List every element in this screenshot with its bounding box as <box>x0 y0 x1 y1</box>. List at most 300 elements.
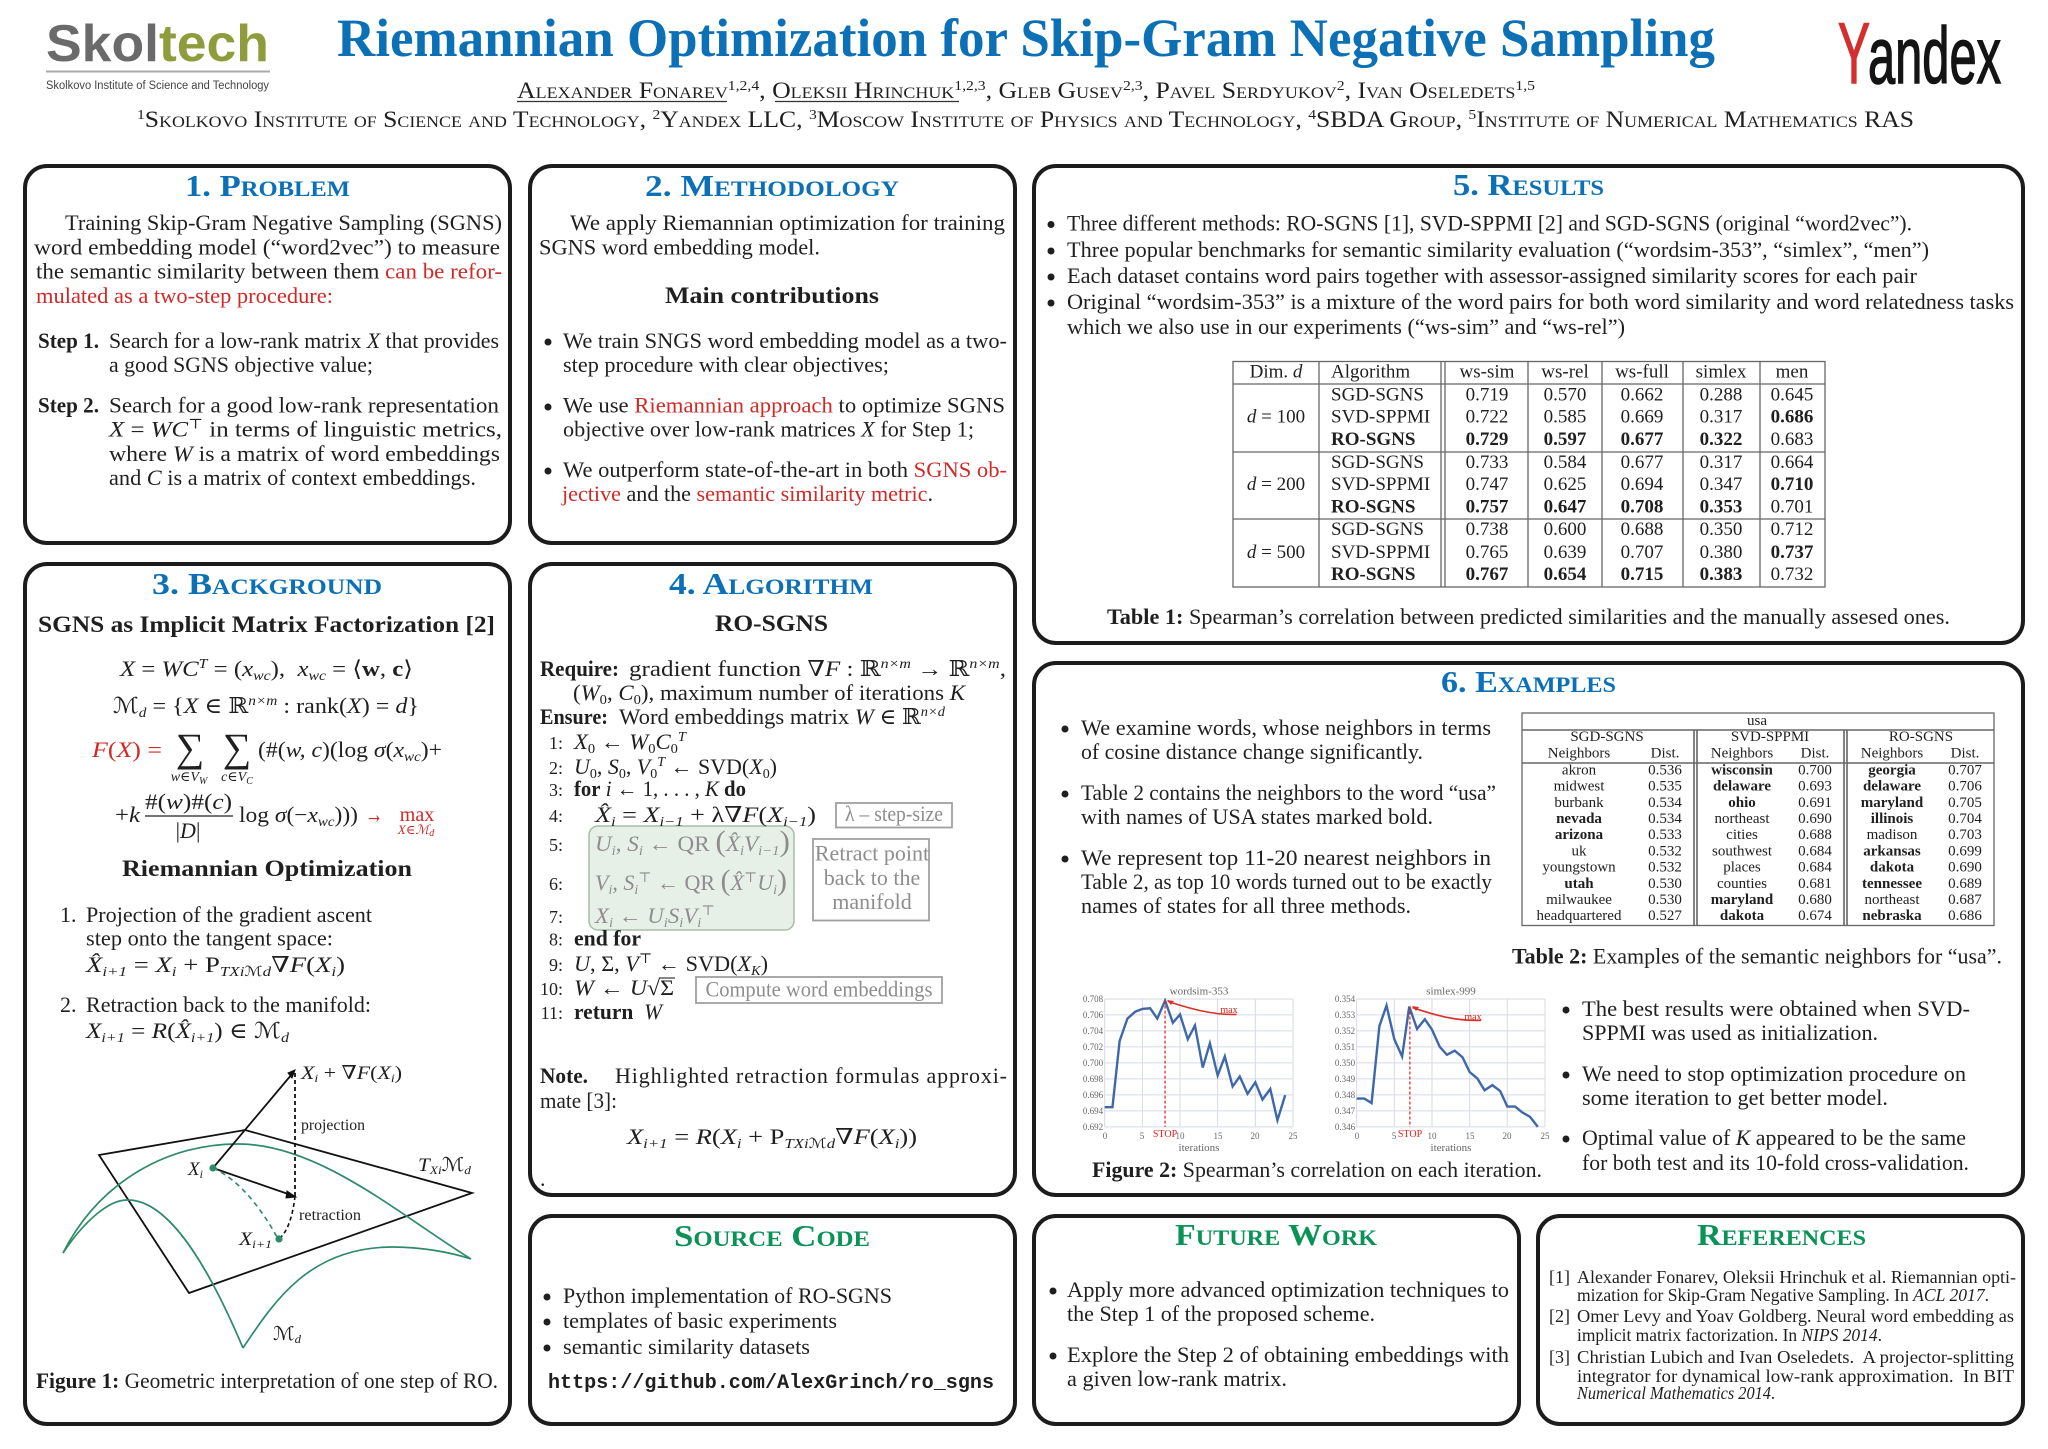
subheading: Main contributions: Main contributions <box>665 283 879 309</box>
formula: manifold definition: X) = d} <box>347 693 418 718</box>
numbered list: optimization steps: 1. <box>60 902 76 927</box>
text block: methodology intro: We apply Riemannian optimization for training <box>570 210 1005 235</box>
text block: require and ensure: ), maximum number of iterations <box>641 680 950 705</box>
table 1: Spearman correlation: 0.664 <box>1771 452 1814 473</box>
table 1: Spearman correlation: 0.707 <box>1621 542 1663 563</box>
algorithm steps: 0 <box>590 767 597 782</box>
table 2: usa neighbors: SVD-SPPMI <box>1731 729 1809 745</box>
heading: Future Work: Future Work <box>1175 1217 1377 1252</box>
text block: step 1: a good SGNS objective value; <box>109 352 373 377</box>
algorithm steps: ) <box>777 864 787 897</box>
bullet list: source code contents: templates of basic experiments <box>563 1308 837 1333</box>
algorithm steps: U, Σ, V <box>574 951 639 976</box>
heading: Background: 3. Background <box>152 566 382 601</box>
affiliations: 5 <box>1468 108 1476 123</box>
affiliations: Institute of Numerical Mathematics RAS <box>1476 107 1914 132</box>
algorithm steps: i <box>740 844 744 859</box>
bullet list: findings: The best results were obtained when SVD- <box>1582 996 1970 1021</box>
table 2: usa neighbors: 0.703 <box>1948 827 1982 843</box>
table 1: Spearman correlation: ws-rel <box>1541 362 1589 382</box>
table 2: usa neighbors: akron <box>1562 762 1597 778</box>
text block: step 2 <box>38 392 502 490</box>
table 2: usa neighbors: 0.674 <box>1798 908 1832 924</box>
algorithm steps: ← QR <box>651 870 721 895</box>
reference list: integrator for dynamical low-rank approximation. In BIT <box>1577 1366 2014 1386</box>
bullet list: contributions: We use Riemannian approach to optimize SGNS <box>563 392 1005 418</box>
numbered list: optimization steps: F(X <box>290 952 328 977</box>
panel: 2. Methodology <box>530 166 1015 543</box>
line chart: simlex-999: simlex-999 <box>1426 986 1476 998</box>
figure: geometric interpretation diagram: + ∇ <box>318 1063 357 1084</box>
text block: require and ensure: (W <box>573 680 599 705</box>
algorithm steps: ← <box>613 903 647 928</box>
algorithm steps: ) <box>770 754 777 779</box>
logo: Skoltech: Skolkovo Institute of Science and Technology <box>46 80 269 92</box>
text block: require and ensure: K <box>949 680 966 705</box>
figure: geometric interpretation diagram: ℳ <box>442 1155 464 1176</box>
algorithm steps: V <box>744 831 761 856</box>
text block: step 2: in terms of linguistic metrics, <box>203 416 502 442</box>
table 2: usa neighbors: SGD-SGNS <box>1570 729 1644 745</box>
reference list: Omer Levy and Yoav Goldberg. Neural word embedding as <box>1577 1306 2014 1326</box>
table 1: Spearman correlation: 0.683 <box>1771 429 1813 450</box>
logo: Skoltech: Skoltech <box>46 15 269 73</box>
panel: 5. Results <box>1034 166 2023 643</box>
formula: factorization: = ⟨ <box>326 656 362 681</box>
text block: note: = <box>668 1124 696 1149</box>
figure: geometric interpretation diagram: Xi <box>429 1163 442 1177</box>
numbered list: optimization steps: Retraction back to the manifold: <box>86 992 371 1017</box>
line chart: wordsim-353: wordsim-353 <box>1170 986 1229 998</box>
text block: note: i <box>737 1137 742 1152</box>
algorithm steps: , <box>626 754 637 779</box>
algorithm steps: , <box>616 831 627 856</box>
callout: retract point: manifold <box>832 889 912 914</box>
algorithm steps: U <box>595 831 614 856</box>
numbered list: optimization steps: i+1 <box>101 1031 125 1046</box>
table 1: Spearman correlation: SVD-SPPMI <box>1331 407 1430 428</box>
figure: geometric interpretation diagram: ℳ <box>273 1324 293 1345</box>
table 1: Spearman correlation: 0.317 <box>1700 452 1742 473</box>
figure: geometric interpretation diagram: i <box>314 1071 318 1085</box>
caption: table 1: Table 1: Spearman’s correlation between predicted similarities and the manually assesed ones. <box>1107 604 1950 629</box>
algorithm steps: 10: <box>540 979 563 999</box>
table 1: Spearman correlation: 0.737 <box>1771 542 1814 563</box>
figure: geometric interpretation diagram: i+1 <box>252 1237 272 1251</box>
algorithm steps: i <box>639 844 643 859</box>
table 2: usa neighbors: burbank <box>1554 795 1604 811</box>
table 1: Spearman correlation: 0.686 <box>1771 407 1813 428</box>
numbered list: optimization steps: X <box>154 952 174 977</box>
algorithm steps: ) <box>807 802 816 827</box>
table 1: Spearman correlation: 0.732 <box>1771 564 1813 585</box>
text block: note: i+1 <box>643 1137 668 1152</box>
reference list: [1] <box>1549 1267 1570 1287</box>
line chart: simlex-999: 0.348 <box>1335 1090 1356 1100</box>
line chart: wordsim-353 <box>1083 986 1298 1154</box>
algorithm steps: 6: <box>549 874 563 894</box>
formula: factorization: wc <box>308 669 327 684</box>
table 1: Spearman correlation: 0.288 <box>1700 385 1742 406</box>
numbered list: optimization steps: T <box>220 965 231 980</box>
formula: objective function: X∈ℳ <box>398 822 429 837</box>
line chart: simlex-999: 25 <box>1540 1131 1550 1141</box>
caption: figure 1: Figure 1: Geometric interpretation of one step of RO. <box>36 1368 498 1393</box>
affiliations: Moscow Institute of Physics and Technology, <box>817 107 1308 132</box>
line chart: wordsim-353: 15 <box>1214 1131 1223 1141</box>
algorithm steps: X <box>573 729 590 754</box>
heading: Problem: 1. Problem <box>185 168 350 203</box>
formula: manifold definition: X ∈ ℝ <box>184 693 244 718</box>
table 1: Spearman correlation: SGD-SGNS <box>1331 452 1424 473</box>
bullet list: contributions: step procedure with clear objectives; <box>563 352 889 377</box>
table 1: Spearman correlation: ws-full <box>1615 362 1669 382</box>
table 1: Spearman correlation: 0.733 <box>1466 452 1508 473</box>
table 1: Spearman correlation: 0.729 <box>1466 429 1508 450</box>
formula: manifold definition: ℳ <box>113 693 137 718</box>
panel: Source Code <box>530 1216 1015 1424</box>
figure: geometric interpretation diagram: F(X <box>357 1063 389 1084</box>
line chart: simlex-999: 0.352 <box>1335 1026 1355 1036</box>
table 1: Spearman correlation: 0.585 <box>1544 407 1586 428</box>
line chart: wordsim-353: 0.692 <box>1083 1122 1103 1132</box>
table 2: usa neighbors: maryland <box>1861 795 1924 811</box>
table 2: usa neighbors: arizona <box>1555 827 1604 843</box>
line chart: simlex-999: 0.347 <box>1335 1106 1356 1116</box>
table 1: Spearman correlation: 0.701 <box>1771 497 1813 518</box>
figure: geometric interpretation diagram: X <box>238 1229 254 1250</box>
line chart: simlex-999: 0.350 <box>1335 1058 1356 1068</box>
table 2: usa neighbors: utah <box>1564 876 1594 892</box>
table 2: usa neighbors: 0.533 <box>1648 827 1682 843</box>
table 1: Spearman correlation: 0.645 <box>1771 385 1813 406</box>
affiliations: SBDA Group, <box>1316 107 1468 132</box>
algorithm steps: 9: <box>549 955 563 975</box>
numbered list: optimization steps: ∇ <box>271 952 290 977</box>
highlight: retraction block <box>589 826 794 930</box>
table 2: usa neighbors: northeast <box>1715 811 1770 827</box>
logo: Yandex <box>1838 6 2001 102</box>
bullet list: findings <box>1562 996 1970 1175</box>
algorithm steps: 8: <box>549 930 563 950</box>
line chart: wordsim-353: 0.696 <box>1083 1090 1104 1100</box>
algorithm steps: K <box>750 964 761 979</box>
subheading: Riemannian Optimization: Riemannian Optimization <box>122 856 412 882</box>
bullet list: examples description: with names of USA states marked bold. <box>1081 804 1433 829</box>
table 1: Spearman correlation: Dim. d <box>1250 362 1303 382</box>
numbered list: optimization steps: 2. <box>60 992 76 1017</box>
bullet list: results: Each dataset contains word pairs together with assessor-assigned similarity scores for each pair <box>1067 263 1918 288</box>
figure: geometric interpretation diagram: retraction <box>299 1207 361 1224</box>
text block: note: TXi <box>784 1137 809 1152</box>
numbered list: optimization steps: + P <box>177 952 220 977</box>
numbered list: optimization steps: i+1 <box>102 965 127 980</box>
table 1: Spearman correlation: RO-SGNS <box>1331 497 1415 518</box>
table 2: usa neighbors: tennessee <box>1862 876 1922 892</box>
reference list: [3] <box>1549 1347 1570 1367</box>
figure: geometric interpretation diagram: d <box>295 1332 302 1346</box>
formula: factorization: ), <box>271 656 297 681</box>
table 2: usa neighbors: dakota <box>1720 908 1765 924</box>
panel: 4. Algorithm <box>530 564 1015 1195</box>
formula: manifold definition: : rank( <box>277 693 347 718</box>
panel: 3. Background <box>25 564 510 1424</box>
bullet list: future work: Apply more advanced optimization techniques to <box>1067 1277 1509 1302</box>
algorithm steps: V <box>683 903 700 928</box>
formula: factorization: x <box>296 656 309 681</box>
bullet list: results: Three popular benchmarks for semantic similarity evaluation (“wordsim-353”, “simlex”, “men”) <box>1067 237 1929 262</box>
table 2: usa neighbors: RO-SGNS <box>1889 729 1953 745</box>
line chart: simlex-999 <box>1335 986 1550 1154</box>
table 1: Spearman correlation: 0.719 <box>1466 385 1508 406</box>
text block: require and ensure <box>540 656 1006 729</box>
table 1: Spearman correlation: 0.712 <box>1771 519 1813 540</box>
formula: objective function: c∈V <box>221 770 246 785</box>
text block: require and ensure: 0 <box>600 693 607 708</box>
text block: require and ensure: Require: <box>540 656 619 681</box>
text block: require and ensure: n×m <box>881 657 911 672</box>
affiliations: Yandex LLC, <box>660 107 809 132</box>
text block: step 2: ⊤ <box>188 418 203 432</box>
formula: objective function: wc <box>404 750 422 765</box>
bullet list: examples description: of cosine distance change significantly. <box>1081 739 1423 764</box>
text block: note: . <box>540 1166 546 1191</box>
heading: Algorithm: 4. Algorithm <box>669 566 873 601</box>
bullet list: source code contents: semantic similarity datasets <box>563 1334 810 1359</box>
algorithm steps: return W <box>574 999 664 1024</box>
line chart: simlex-999: 0.349 <box>1335 1074 1356 1084</box>
line chart: wordsim-353: 0.704 <box>1083 1026 1104 1036</box>
formula: manifold definition: d <box>139 706 148 721</box>
numbered list: optimization steps: X̂ <box>85 952 104 977</box>
table 1: Spearman correlation: 0.380 <box>1700 542 1742 563</box>
table 2: usa neighbors: 0.680 <box>1798 892 1832 908</box>
text block: step 2: X = WC <box>109 416 184 442</box>
formula: objective function: ∑ <box>176 725 204 770</box>
table 2: usa neighbors: Dist. <box>1951 746 1979 762</box>
table 2: usa neighbors: 0.707 <box>1948 762 1982 778</box>
formula: factorization: wc <box>253 669 272 684</box>
algorithm steps: 5: <box>549 835 563 855</box>
text block: note: Highlighted retraction formulas approxi- <box>615 1063 1007 1088</box>
formula: factorization: = ( <box>207 656 242 681</box>
text block: require and ensure: , <box>607 680 618 705</box>
algorithm steps: ⊤ <box>638 871 651 886</box>
line chart: wordsim-353: iterations <box>1179 1142 1219 1154</box>
text block: note: i <box>895 1137 900 1152</box>
text block: note: )) <box>899 1124 917 1149</box>
formula: objective function: log σ(−x <box>239 802 317 827</box>
numbered list: optimization steps: step onto the tangent space: <box>86 926 333 950</box>
table 2: usa neighbors: 0.699 <box>1948 844 1982 860</box>
line chart: wordsim-353: 0.702 <box>1083 1042 1103 1052</box>
table 2: usa neighbors: 0.691 <box>1798 795 1832 811</box>
authors: , Oleksii Hrinchuk <box>759 78 955 103</box>
algorithm steps: U <box>647 903 666 928</box>
logo: Yandex: Y <box>1838 6 1870 102</box>
text block: note: F(X <box>854 1124 892 1149</box>
text block: require and ensure: , <box>1000 656 1006 681</box>
table 1: Spearman correlation: 0.350 <box>1700 519 1742 540</box>
line chart: wordsim-353: 0.698 <box>1083 1074 1104 1084</box>
table 2: usa neighbors: delaware <box>1863 779 1921 795</box>
formula: objective function: +k <box>115 802 141 827</box>
table 2: usa neighbors: 0.693 <box>1798 779 1832 795</box>
numbered list: optimization steps: i <box>331 965 336 980</box>
table 1: Spearman correlation: 0.654 <box>1544 564 1587 585</box>
formula: objective function: C <box>246 776 253 787</box>
table 1: Spearman correlation: 0.584 <box>1544 452 1587 473</box>
figure: geometric interpretation diagram: X <box>300 1063 316 1084</box>
callout: retract point: Retract point <box>815 840 929 866</box>
algorithm steps: 1: <box>549 733 563 753</box>
heading: References: References <box>1697 1217 1866 1252</box>
table 1: Spearman correlation: 0.765 <box>1466 542 1508 563</box>
algorithm steps: = <box>616 802 643 827</box>
table 2: usa neighbors: youngstown <box>1542 860 1616 876</box>
line chart: simlex-999: iterations <box>1431 1142 1471 1154</box>
algorithm steps: S <box>608 754 619 779</box>
formula: objective function: W <box>199 776 209 787</box>
authors: 2,3 <box>1123 79 1143 94</box>
reference list: Numerical Mathematics 2014. <box>1576 1383 1775 1403</box>
bullet list: findings: Optimal value of K appeared to be the same <box>1582 1125 1966 1150</box>
bullet list: findings: We need to stop optimization procedure on <box>1582 1061 1966 1086</box>
algorithm steps: ← SVD( <box>652 951 738 976</box>
affiliations: 2 <box>652 108 660 123</box>
algorithm steps: X <box>642 802 661 827</box>
formula: objective function: max <box>400 804 434 826</box>
algorithm steps: i <box>773 883 777 898</box>
affiliations: 3 <box>809 108 817 123</box>
line chart: simlex-999: 15 <box>1466 1131 1475 1141</box>
algorithm steps: ⊤ <box>744 871 757 886</box>
numbered list: optimization steps: ) <box>336 952 345 977</box>
bullet list: findings: some iteration to get better model. <box>1582 1085 1888 1110</box>
table 2: usa neighbors: northeast <box>1865 892 1920 908</box>
reference list: Christian Lubich and Ivan Oseledets. A projector-splitting <box>1577 1347 2014 1367</box>
formula: objective function: wc <box>318 815 335 830</box>
panel: References <box>1538 1216 2023 1424</box>
text block: problem statement: word embedding model (“word2vec”) to measure <box>34 234 500 260</box>
text block: require and ensure: n×m <box>969 657 1000 672</box>
numbered list: optimization steps: R(X̂ <box>152 1018 189 1043</box>
table 1: Spearman correlation: 0.710 <box>1771 474 1813 495</box>
formula: objective function: ))) <box>335 802 358 827</box>
algorithm steps: W <box>629 729 650 754</box>
algorithm steps: i−1 <box>783 815 807 830</box>
table 1: Spearman correlation: ws-sim <box>1460 362 1515 382</box>
text block: note: + P <box>742 1124 784 1149</box>
algorithm steps: U <box>757 870 775 895</box>
bullet list: contributions: objective over low-rank matrices X for Step 1; <box>563 416 974 442</box>
text block: note: mate [3]: <box>540 1088 617 1113</box>
heading: Examples: 6. Examples <box>1441 664 1616 699</box>
algorithm steps: i <box>608 883 612 898</box>
figure: geometric interpretation diagram: i <box>391 1071 395 1085</box>
table 1: Spearman correlation: 0.757 <box>1466 497 1509 518</box>
authors: , Gleb Gusev <box>986 78 1123 103</box>
table 1: Spearman correlation: 0.597 <box>1544 429 1587 450</box>
table 2: usa neighbors: 0.530 <box>1648 876 1682 892</box>
text block: problem statement <box>34 210 502 308</box>
formula: objective function: ∑ <box>223 725 251 770</box>
text block: note: R(X <box>696 1124 734 1149</box>
callout: retract point <box>813 839 929 920</box>
algorithm steps: ) <box>780 825 790 858</box>
algorithm steps: T <box>678 730 687 745</box>
algorithm steps: i <box>679 916 683 931</box>
authors: 1,2,3 <box>954 79 986 94</box>
figure: geometric interpretation diagram: X <box>188 1159 200 1180</box>
callout: compute word embeddings: Compute word embeddings <box>706 976 932 1002</box>
table 1: Spearman correlation: 0.715 <box>1621 564 1663 585</box>
authors: Alexander Fonarev <box>517 78 705 103</box>
numbered list: optimization steps: = <box>127 952 155 977</box>
text block: step 1: Search for a low-rank matrix X that provides <box>109 328 499 353</box>
table 2: usa neighbors: milwaukee <box>1546 892 1612 908</box>
line chart: wordsim-353: 0.708 <box>1083 994 1104 1004</box>
algorithm steps: ) <box>761 951 768 976</box>
table 2: usa neighbors <box>1522 713 1994 926</box>
table 1: Spearman correlation: d = 500 <box>1247 542 1305 563</box>
affiliations: Skolkovo Institute of Science and Technology, <box>145 107 652 132</box>
numbered list: optimization steps: i+1 <box>191 1031 214 1046</box>
bullet list: source code contents <box>544 1283 892 1359</box>
table 2: usa neighbors: 0.684 <box>1798 860 1832 876</box>
table 1: Spearman correlation: 0.767 <box>1466 564 1509 585</box>
bullet list: results <box>1048 210 2014 339</box>
table 2: usa neighbors: 0.690 <box>1798 811 1832 827</box>
algorithm steps: 0 <box>763 767 770 782</box>
bullet list: results: Original “wordsim-353” is a mixture of the word pairs for both word similarity and word relatedness tasks <box>1067 289 2014 314</box>
bullet list: examples description: We examine words, whose neighbors in terms <box>1081 715 1491 740</box>
table 2: usa neighbors: cities <box>1726 827 1758 843</box>
bullet list: examples description: names of states for all three methods. <box>1081 893 1411 918</box>
algorithm steps: i <box>664 916 668 931</box>
formula: manifold definition: = { <box>146 693 184 718</box>
algorithm steps: 11: <box>541 1003 563 1023</box>
table 1: Spearman correlation: 0.738 <box>1466 519 1508 540</box>
table 1: Spearman correlation: 0.694 <box>1621 474 1664 495</box>
line chart: simlex-999: 0.354 <box>1335 994 1356 1004</box>
text block: note: ∇ <box>835 1124 854 1149</box>
authors: 1,2,4 <box>728 79 759 94</box>
figure: geometric interpretation diagram: i <box>200 1167 203 1181</box>
line chart: simlex-999: 0.353 <box>1335 1010 1356 1020</box>
table 1: Spearman correlation: 0.600 <box>1544 519 1586 540</box>
table 1: Spearman correlation: 0.677 <box>1621 429 1664 450</box>
algorithm steps: C <box>655 729 671 754</box>
caption: figure 2: Figure 2: Spearman’s correlation on each iteration. <box>1092 1157 1542 1182</box>
table 1: Spearman correlation: 0.662 <box>1621 385 1663 406</box>
line chart: simlex-999: 0.351 <box>1335 1042 1355 1052</box>
numbered list: optimization steps <box>60 902 372 1046</box>
table 2: usa neighbors: usa <box>1747 713 1767 729</box>
text block: require and ensure: n×d <box>921 705 946 720</box>
line chart: wordsim-353: 25 <box>1288 1131 1298 1141</box>
numbered list: optimization steps: Xiℳd <box>229 965 270 980</box>
bullet list: results: which we also use in our experiments (“ws-sim” and “ws-rel”) <box>1067 314 1625 339</box>
table 1: Spearman correlation: 0.353 <box>1700 497 1742 518</box>
table 2: usa neighbors: places <box>1723 860 1761 876</box>
line chart: simlex-999: 5 <box>1392 1131 1397 1141</box>
panel: 6. Examples <box>1034 663 2023 1195</box>
table 1: Spearman correlation: 0.625 <box>1544 474 1586 495</box>
table 2: usa neighbors: delaware <box>1713 779 1771 795</box>
text block: note <box>540 1063 1007 1191</box>
bullet list: future work: Explore the Step 2 of obtaining embeddings with <box>1067 1342 1509 1367</box>
